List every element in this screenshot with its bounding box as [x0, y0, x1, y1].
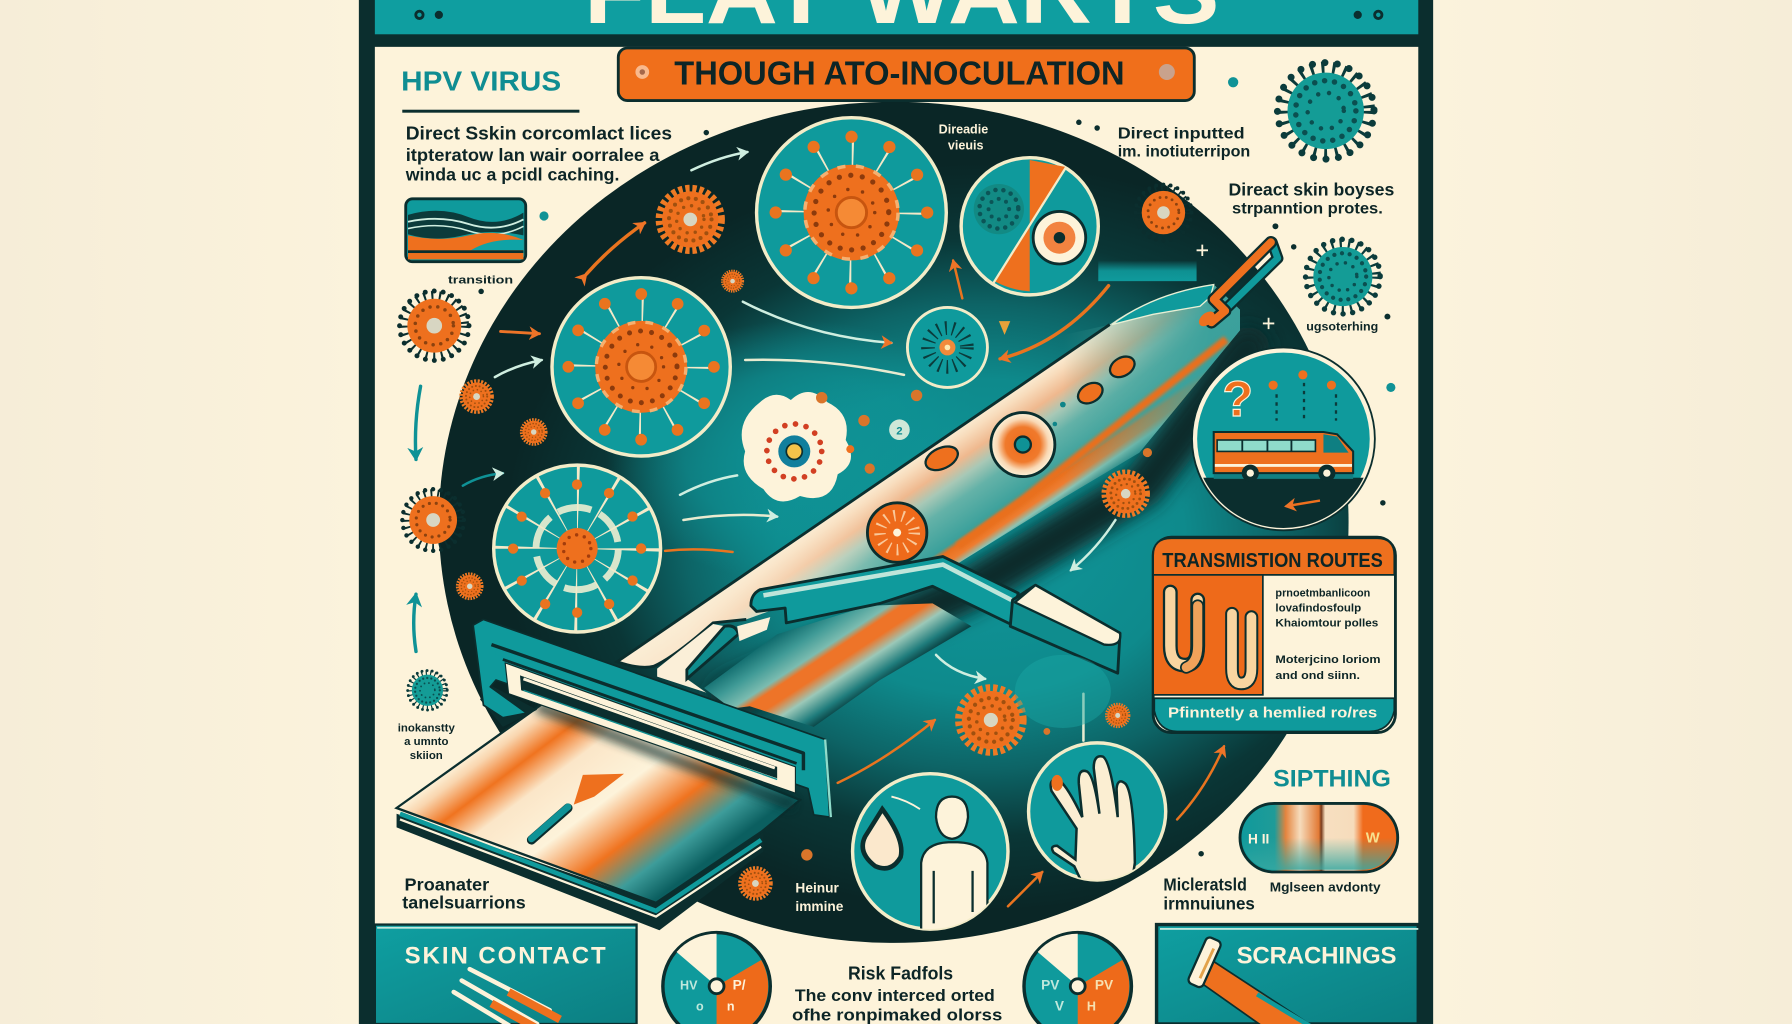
dread virus label — [939, 123, 988, 153]
micleratsld label: irmnuiunes — [1163, 894, 1255, 914]
pie chart right: PV — [1041, 978, 1060, 993]
top right text: im. inotiuterripon — [1118, 144, 1250, 161]
prounator label: Proanater — [405, 874, 489, 894]
lower skin band piece — [704, 603, 971, 727]
small lesion — [1074, 379, 1106, 408]
teal dot — [539, 211, 549, 221]
panel text: prnoetmbanlicoon — [1275, 588, 1370, 600]
lesion ring — [991, 413, 1055, 477]
top right text: Direct inputted — [1118, 125, 1245, 142]
hand circle — [1029, 743, 1166, 886]
panel text: and ond siinn. — [1275, 670, 1360, 682]
dark frame — [359, 0, 1433, 1024]
left lower label: skiion — [410, 750, 443, 762]
left lower label — [398, 722, 455, 762]
pie chart left — [663, 933, 770, 1024]
tiny orange virus — [458, 574, 482, 598]
razor head shadow — [480, 686, 537, 727]
razor chip — [737, 617, 770, 641]
pie chart right: PV — [1095, 978, 1114, 993]
teardrop — [863, 809, 901, 868]
pie chart right: V — [1055, 998, 1065, 1013]
hand — [1051, 756, 1135, 886]
orange streak on band — [958, 339, 1226, 546]
big virus circle 3 — [494, 465, 661, 632]
tiny orange virus — [740, 868, 771, 899]
razor handle head — [1010, 585, 1120, 673]
teal dots — [1228, 77, 1395, 392]
razor stem — [687, 626, 738, 679]
panel text: lovafindosfoulp — [1275, 602, 1361, 614]
skin contact panel — [375, 925, 637, 1024]
orange subtitle banner — [618, 48, 1194, 101]
orange wedge — [999, 321, 1010, 335]
heinur immune label: immine — [795, 899, 844, 914]
ugsoterhing label: ugsoterhing — [1306, 319, 1378, 333]
question mark: ? — [1222, 370, 1253, 427]
skin band — [617, 285, 1240, 727]
razor handle — [751, 557, 1120, 673]
prounator label: tanelsuarrions — [402, 893, 526, 913]
slab tool mark — [531, 774, 624, 840]
small virus circle — [907, 307, 987, 387]
cream inner panel — [375, 47, 1418, 1024]
subtitle: THOUGH ATO-INOCULATION — [674, 56, 1125, 93]
top right teal virus — [1277, 63, 1374, 159]
orange virus lower — [960, 689, 1022, 751]
teal specks — [1053, 402, 1066, 426]
beam glow near razor tip — [1098, 261, 1197, 281]
razor head — [473, 619, 831, 817]
header banner — [375, 0, 1418, 42]
panel heading: SCRACHINGS — [1237, 942, 1397, 969]
panel heading: SKIN CONTACT — [405, 942, 606, 969]
top right text — [1118, 125, 1250, 161]
intro text block — [405, 122, 672, 185]
razor neck — [657, 624, 725, 693]
infographic: flat warts auto-inoculation — [358, 0, 1434, 1024]
plus signs — [1197, 245, 1274, 329]
person circle — [853, 774, 1008, 933]
arrows in circle — [414, 152, 1224, 906]
fingernail lesion — [1051, 775, 1063, 791]
orange virus — [1105, 473, 1147, 515]
pie chart right: H — [1087, 999, 1096, 1013]
flower-shaped cell — [742, 392, 854, 501]
dread virus label: Direadie — [939, 123, 988, 137]
razor tip hook — [1211, 242, 1278, 322]
tip lesion — [1196, 309, 1218, 329]
razor icon — [1187, 936, 1311, 1024]
pie chart left: P/ — [733, 978, 746, 993]
hpv virus heading: HPV VIRUS — [401, 65, 561, 96]
bus circle — [1189, 347, 1383, 535]
bus — [1214, 432, 1353, 482]
main circular illustration — [439, 102, 1349, 943]
razor shadow on slab — [537, 706, 794, 806]
panel heading: TRANSMISTION ROUTES — [1162, 549, 1383, 572]
prounator label — [402, 874, 526, 913]
left lower label: a umnto — [404, 736, 448, 748]
big virus circle 2 — [552, 278, 730, 456]
scratchings panel — [1157, 925, 1418, 1024]
tiny orange virus — [723, 271, 743, 291]
glow under handle head — [1015, 655, 1111, 728]
transmission routes panel — [1153, 537, 1395, 733]
risk factors text: The conv interced orted — [795, 986, 995, 1005]
small orange virus — [660, 189, 720, 250]
dread virus label: vieuis — [948, 139, 984, 153]
skin pill: H II — [1248, 831, 1269, 846]
micleratsld label: Micleratsld — [1163, 874, 1247, 894]
tool stripes — [454, 969, 560, 1024]
skin slab — [397, 699, 800, 930]
lesion orange — [867, 503, 927, 562]
left dark-spiked virus — [400, 291, 469, 360]
teal glow in disc — [606, 320, 994, 583]
micleratsld label — [1163, 874, 1255, 914]
shadow under skin band — [731, 349, 1248, 697]
heinur immune label: Heinur — [795, 881, 839, 896]
lesion — [922, 442, 962, 475]
intro text block: winda uc a pcidl caching. — [405, 165, 619, 185]
panel footer — [1154, 698, 1394, 731]
left lower label: inokanstty — [398, 722, 455, 734]
pie chart left: n — [727, 999, 735, 1013]
panel footer: Pfinntetly a hemlied ro/res — [1168, 706, 1377, 722]
skin layers icon — [406, 199, 526, 262]
pie chart left: o — [696, 999, 704, 1013]
finger illustration — [1153, 575, 1263, 695]
skin pill — [1240, 803, 1398, 872]
panel text: Khaiomtour polles — [1275, 617, 1378, 629]
decorative dots — [478, 120, 1390, 856]
teal cap — [1112, 285, 1214, 325]
heinur immune label — [795, 881, 844, 914]
small badge — [889, 419, 910, 440]
panel text — [1275, 588, 1381, 682]
person figure — [921, 797, 987, 933]
sipthing heading: SIPTHING — [1273, 765, 1391, 792]
panel text: Moterjcino loriom — [1275, 654, 1381, 666]
pie chart left: HV — [680, 979, 698, 993]
left teal virus — [408, 671, 447, 710]
small lesion — [1106, 352, 1138, 381]
intro text block: itpteratow lan wair oorralee a — [406, 145, 660, 165]
risk factors text — [792, 962, 1002, 1024]
floating particles — [801, 390, 1152, 861]
pie-shaped virus circle — [961, 158, 1098, 295]
right teal virus — [1306, 239, 1380, 314]
transition label: transition — [448, 274, 513, 286]
right text: Direact skin boyses — [1229, 179, 1394, 199]
right text: strpanntion protes. — [1232, 201, 1383, 218]
intro text block: Direct Sskin corcomlact lices — [406, 122, 672, 143]
pie chart right — [1024, 933, 1131, 1024]
droplets — [1269, 370, 1336, 421]
big virus circle 1 — [757, 118, 946, 307]
small badge: 2 — [896, 425, 903, 437]
right text — [1229, 179, 1394, 218]
tiny orange virus — [522, 420, 546, 444]
left virus — [402, 489, 464, 551]
skin pill: W — [1366, 830, 1380, 846]
risk factors text: Risk Fadfols — [848, 962, 953, 983]
pill caption: Mglseen avdonty — [1270, 880, 1381, 894]
tiny orange virus — [1107, 704, 1129, 726]
tiny orange virus — [461, 381, 492, 412]
small orange virus — [1135, 185, 1191, 241]
